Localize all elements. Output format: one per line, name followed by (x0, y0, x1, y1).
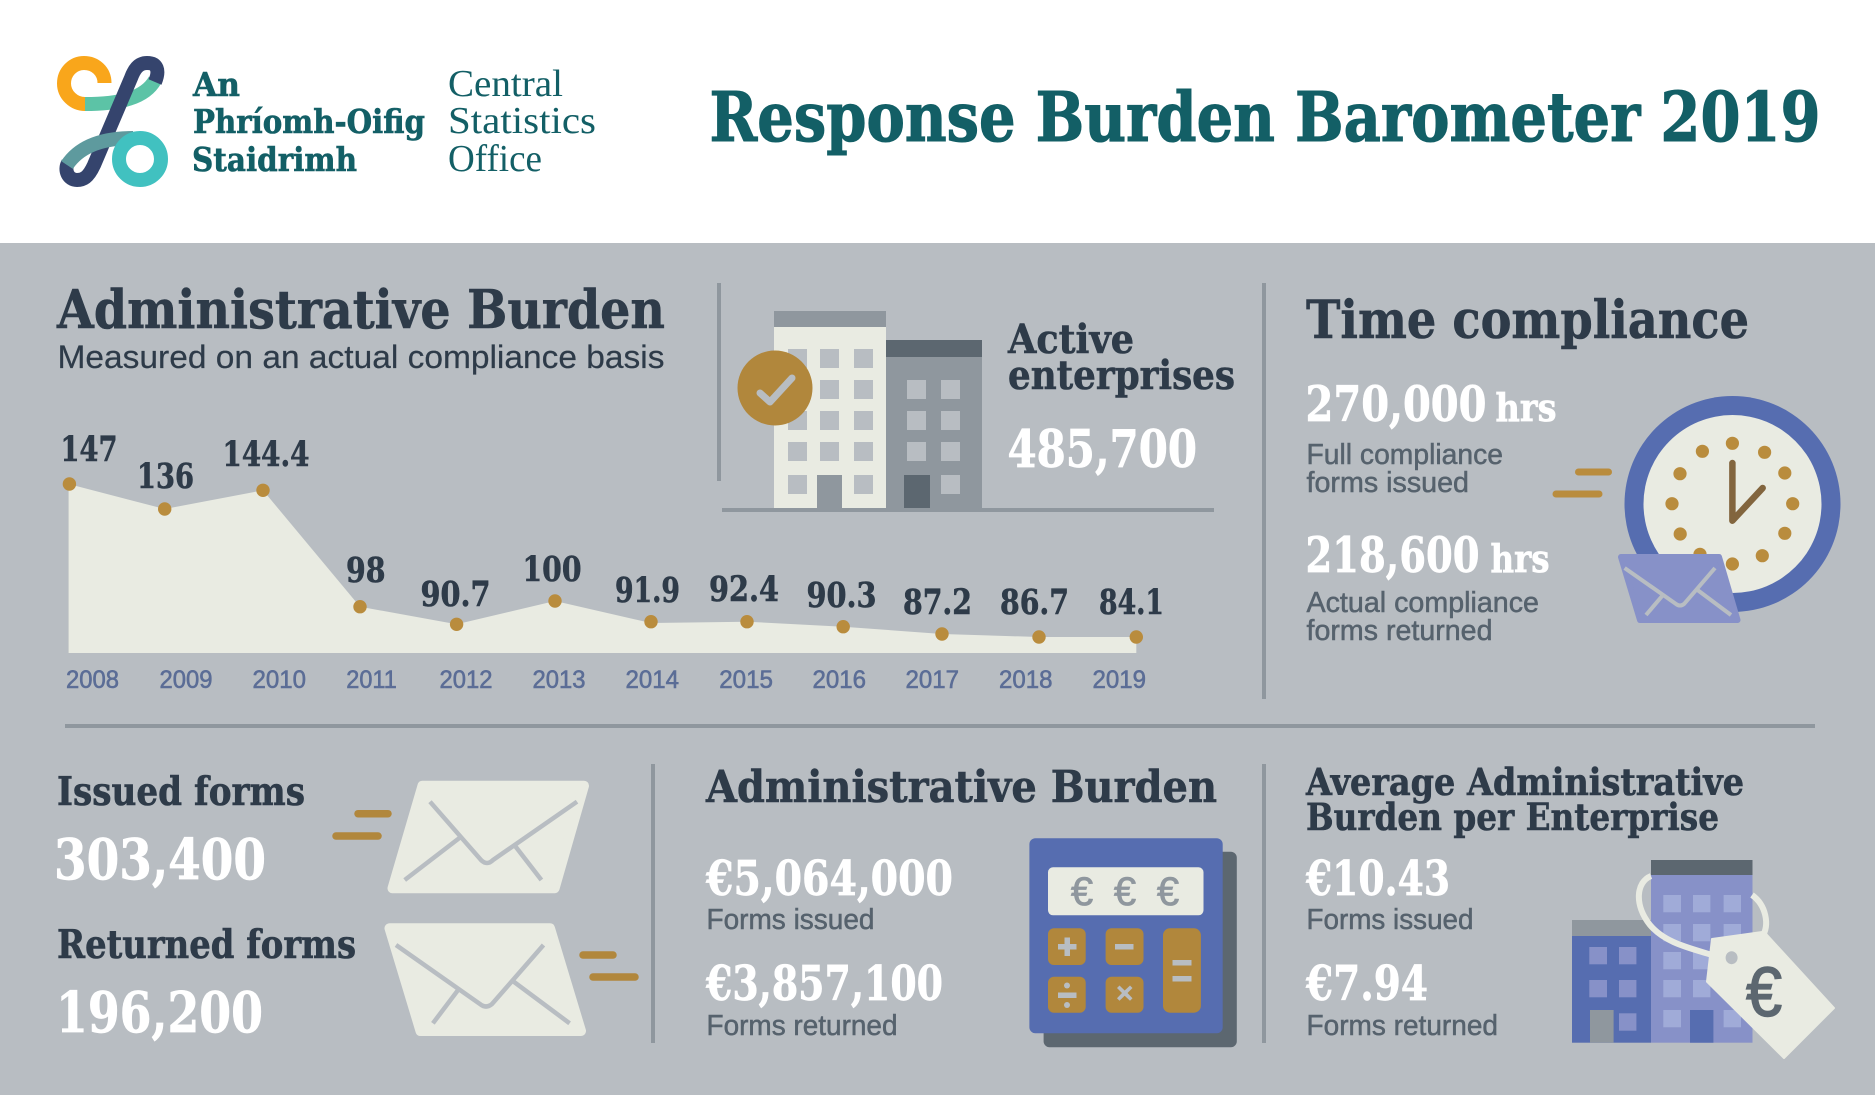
logo text: English name: Office (448, 138, 542, 180)
chart year axis labels: 2015 (719, 666, 773, 694)
panel: issued and returned forms (54, 769, 635, 1046)
stat: actual compliance hours: forms returned (1306, 615, 1492, 647)
stat: forms issued cost: Forms issued (706, 904, 874, 936)
stat: cost per form issued: Forms issued (1306, 904, 1474, 936)
chart value labels: 86.7 (1000, 582, 1069, 623)
subtitle: Measured on an actual compliance basis (58, 339, 664, 375)
chart year axis labels: 2012 (440, 666, 492, 694)
chart year axis labels: 2018 (999, 666, 1052, 694)
stat: actual compliance hours: Actual compliance (1306, 587, 1539, 619)
heading (1305, 760, 1744, 839)
stat: actual compliance hours: 218,600 (1306, 526, 1480, 584)
chart value labels: 100 (522, 549, 582, 590)
stat: returned forms: Returned forms (57, 922, 356, 968)
icon: returning envelope (390, 928, 635, 1031)
stat: issued forms: Issued forms (57, 769, 305, 815)
panel: administrative burden chart (56, 279, 1164, 694)
stat: full compliance hours: forms issued (1306, 467, 1469, 499)
icon: clock with envelope (1621, 396, 1840, 620)
chart value labels (60, 429, 1164, 623)
heading: active enterprises: Active (1007, 316, 1134, 363)
chart year axis labels: 2014 (626, 666, 679, 694)
chart value labels: 98 (346, 550, 386, 591)
heading: Time compliance (1306, 290, 1749, 351)
chart year axis labels: 2011 (346, 666, 397, 694)
panel: active enterprises (722, 311, 1235, 512)
value: active enterprises: 485,700 (1008, 420, 1197, 480)
icon: buildings with euro price tag (1572, 860, 1834, 1058)
icon: calculator: € (1071, 870, 1093, 914)
stat: full compliance hours: hrs (1496, 385, 1556, 430)
chart value labels: 147 (60, 429, 118, 470)
stat: forms returned cost: €3,857,100 (705, 956, 943, 1012)
stat: returned forms (56, 922, 356, 1046)
stat: cost per form returned (1305, 956, 1498, 1042)
chart year axis labels: 2017 (906, 666, 959, 694)
chart value labels: 144.4 (222, 434, 310, 475)
icon: calculator: € (1114, 870, 1136, 914)
icon: buildings with euro price tag: € (1746, 953, 1782, 1031)
stat: forms returned cost (705, 956, 943, 1042)
stat: actual compliance hours (1306, 526, 1550, 647)
chart value labels: 90.7 (420, 574, 490, 615)
chart year axis labels: 2013 (532, 666, 586, 694)
logo text: English name (448, 63, 596, 180)
heading: Administrative Burden (705, 762, 1217, 813)
stat: cost per form issued (1305, 851, 1474, 936)
icon: outgoing envelope (336, 786, 584, 888)
stat: full compliance hours (1306, 375, 1556, 499)
panel: average burden per enterprise (1305, 760, 1834, 1058)
stat: cost per form returned: €7.94 (1305, 956, 1428, 1012)
logo text: Irish name: An (192, 65, 240, 104)
chart value labels: 91.9 (615, 570, 680, 611)
chart year axis labels (66, 666, 1146, 694)
stat: issued forms: 303,400 (54, 827, 266, 893)
stat: issued forms (54, 769, 305, 893)
chart value labels: 84.1 (1099, 582, 1164, 623)
stat: forms issued cost: €5,064,000 (705, 851, 953, 907)
chart year axis labels: 2010 (252, 666, 306, 694)
stat: forms returned cost: Forms returned (706, 1010, 898, 1042)
icon: calculator: € (1157, 870, 1179, 914)
logo text: Irish name: Staidrimh (192, 140, 357, 179)
icon: calculator (1029, 838, 1237, 1047)
heading: active enterprises: enterprises (1008, 352, 1235, 399)
heading: Burden per Enterprise (1306, 795, 1719, 839)
chart year axis labels: 2008 (66, 666, 119, 694)
icon: knot symbol (64, 63, 161, 180)
stat: full compliance hours: 270,000 (1306, 375, 1486, 433)
stat: cost per form issued: €10.43 (1305, 851, 1450, 907)
stat: returned forms: 196,200 (56, 980, 263, 1046)
heading: active enterprises (1007, 316, 1235, 399)
chart year axis labels: 2019 (1092, 666, 1146, 694)
icon: speed lines (1556, 472, 1608, 494)
stat: forms issued cost (705, 851, 953, 936)
chart value labels: 92.4 (709, 569, 779, 610)
panel: time compliance (1306, 290, 1840, 647)
chart value labels: 90.3 (806, 575, 876, 616)
stat: actual compliance hours: hrs (1490, 536, 1550, 581)
heading: Average Administrative (1305, 760, 1744, 804)
logo: CSO symbol and name (64, 63, 596, 180)
chart value labels: 87.2 (903, 582, 972, 623)
logo text: Irish name: Phríomh-Oifig (193, 102, 425, 141)
logo text: English name: Statistics (448, 100, 596, 142)
chart value labels: 136 (137, 456, 194, 497)
logo text: Irish name (192, 65, 425, 179)
icon: office buildings with check badge (722, 311, 1214, 512)
chart year axis labels: 2009 (160, 666, 212, 694)
logo text: English name: Central (448, 63, 563, 105)
panel: administrative burden cost (705, 762, 1237, 1047)
chart year axis labels: 2016 (812, 666, 866, 694)
stat: cost per form returned: Forms returned (1306, 1010, 1498, 1042)
stat: full compliance hours: Full compliance (1306, 439, 1503, 471)
heading: Administrative Burden (56, 279, 665, 341)
area chart (60, 429, 1164, 694)
